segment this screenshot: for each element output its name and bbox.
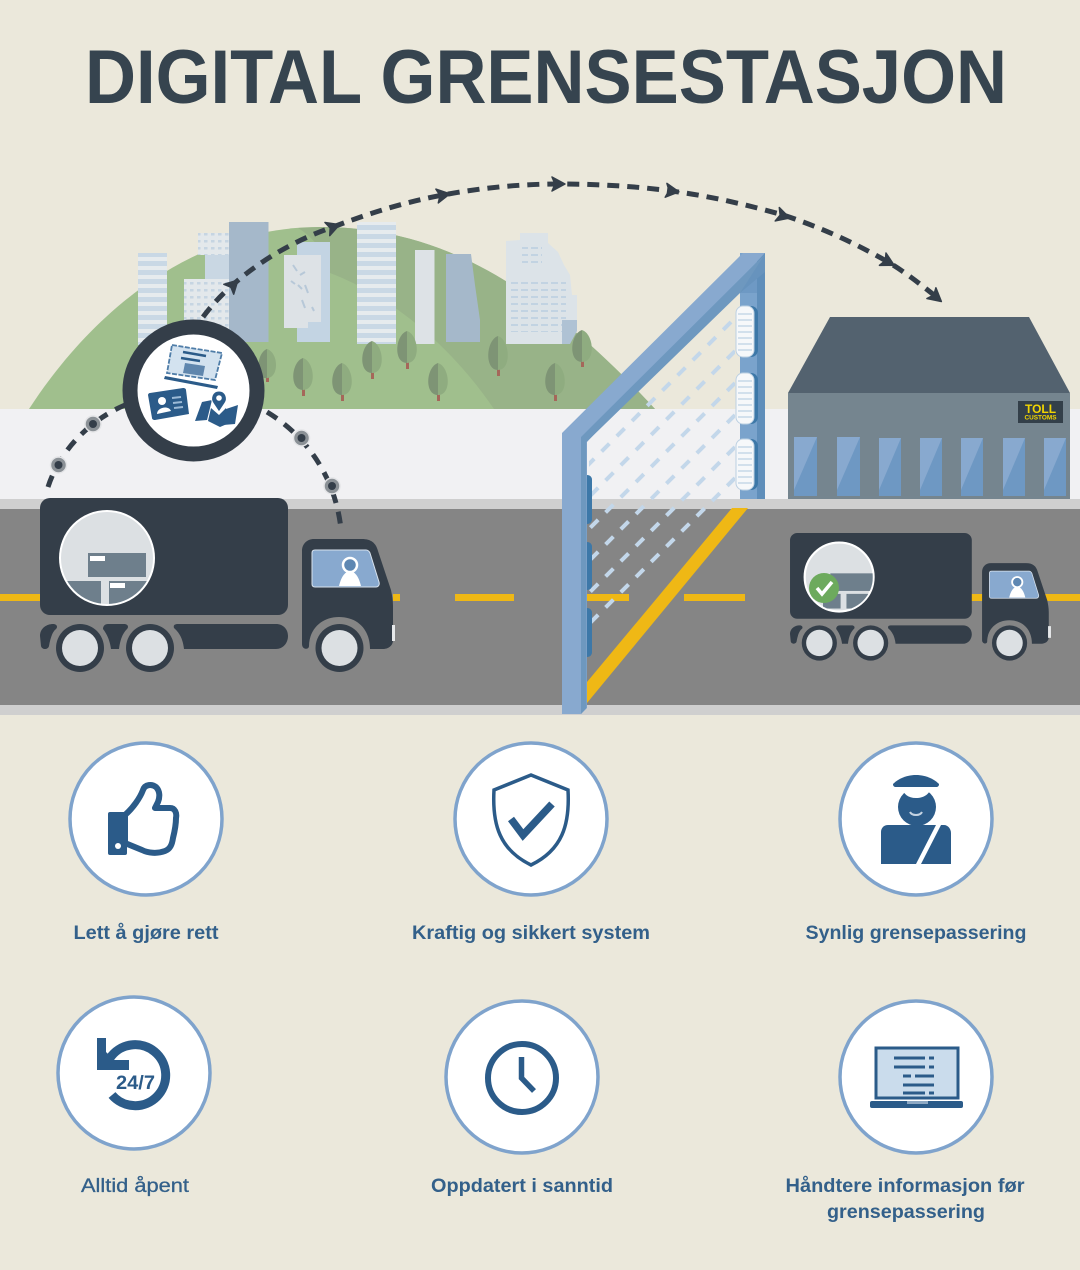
feature: handle information before crossing	[840, 1001, 992, 1153]
feature: easy to do right	[70, 743, 222, 895]
wheels	[56, 624, 364, 672]
city buildings	[138, 222, 577, 345]
dashed route arc over city	[203, 177, 946, 317]
toll sign: TOLL	[1025, 402, 1056, 416]
icon: thumbs up	[108, 785, 176, 855]
dashed arcs from truck to data circle	[48, 405, 341, 529]
feature: always open	[58, 997, 210, 1149]
trees	[258, 330, 592, 401]
cab	[302, 539, 395, 649]
scanner light rays	[589, 320, 735, 624]
data circle with icons	[130, 327, 257, 454]
icon: shield check	[494, 775, 568, 865]
large truck	[40, 498, 395, 672]
pavement strip	[0, 409, 1080, 499]
feature: updated in real time	[446, 1001, 598, 1153]
label: updated in real time: Oppdatert i sanntid	[431, 1176, 613, 1197]
icon: customs officer	[881, 775, 951, 864]
icon: map with pin	[195, 391, 238, 427]
label: visible border crossing: Synlig grensepassering	[806, 923, 1026, 944]
icon: 24/7 arrow: 24/7	[116, 1073, 155, 1094]
title: DIGITAL GRENSESTASJON	[85, 35, 1007, 120]
road	[0, 499, 1080, 715]
cargo scan circle	[60, 511, 154, 611]
label: always open: Alltid åpent	[81, 1176, 190, 1197]
green hill	[29, 227, 655, 409]
icon: 24/7 arrow	[97, 1038, 166, 1106]
label: handle information before crossing: Håndtere informasjon før	[786, 1176, 1025, 1197]
icon: laptop	[870, 1048, 963, 1108]
label: handle information before crossing	[786, 1176, 1025, 1223]
icon: ID card	[148, 388, 189, 420]
icon: green check badge	[809, 573, 839, 603]
small truck	[790, 533, 1051, 661]
toll sign: CUSTOMS	[1024, 416, 1056, 422]
label: easy to do right: Lett å gjøre rett	[74, 923, 219, 944]
icon: laptop	[164, 345, 222, 389]
scanner gate	[562, 253, 765, 714]
feature: visible border crossing	[840, 743, 992, 895]
customs building	[788, 317, 1070, 499]
left scanners	[583, 475, 592, 657]
label: handle information before crossing: grensepassering	[827, 1202, 985, 1223]
icon: clock	[488, 1044, 556, 1112]
toll sign	[1018, 401, 1063, 423]
right scanners	[736, 306, 758, 490]
label: strong secure system: Kraftig og sikkert system	[412, 923, 650, 944]
feature: strong secure system	[455, 743, 607, 895]
